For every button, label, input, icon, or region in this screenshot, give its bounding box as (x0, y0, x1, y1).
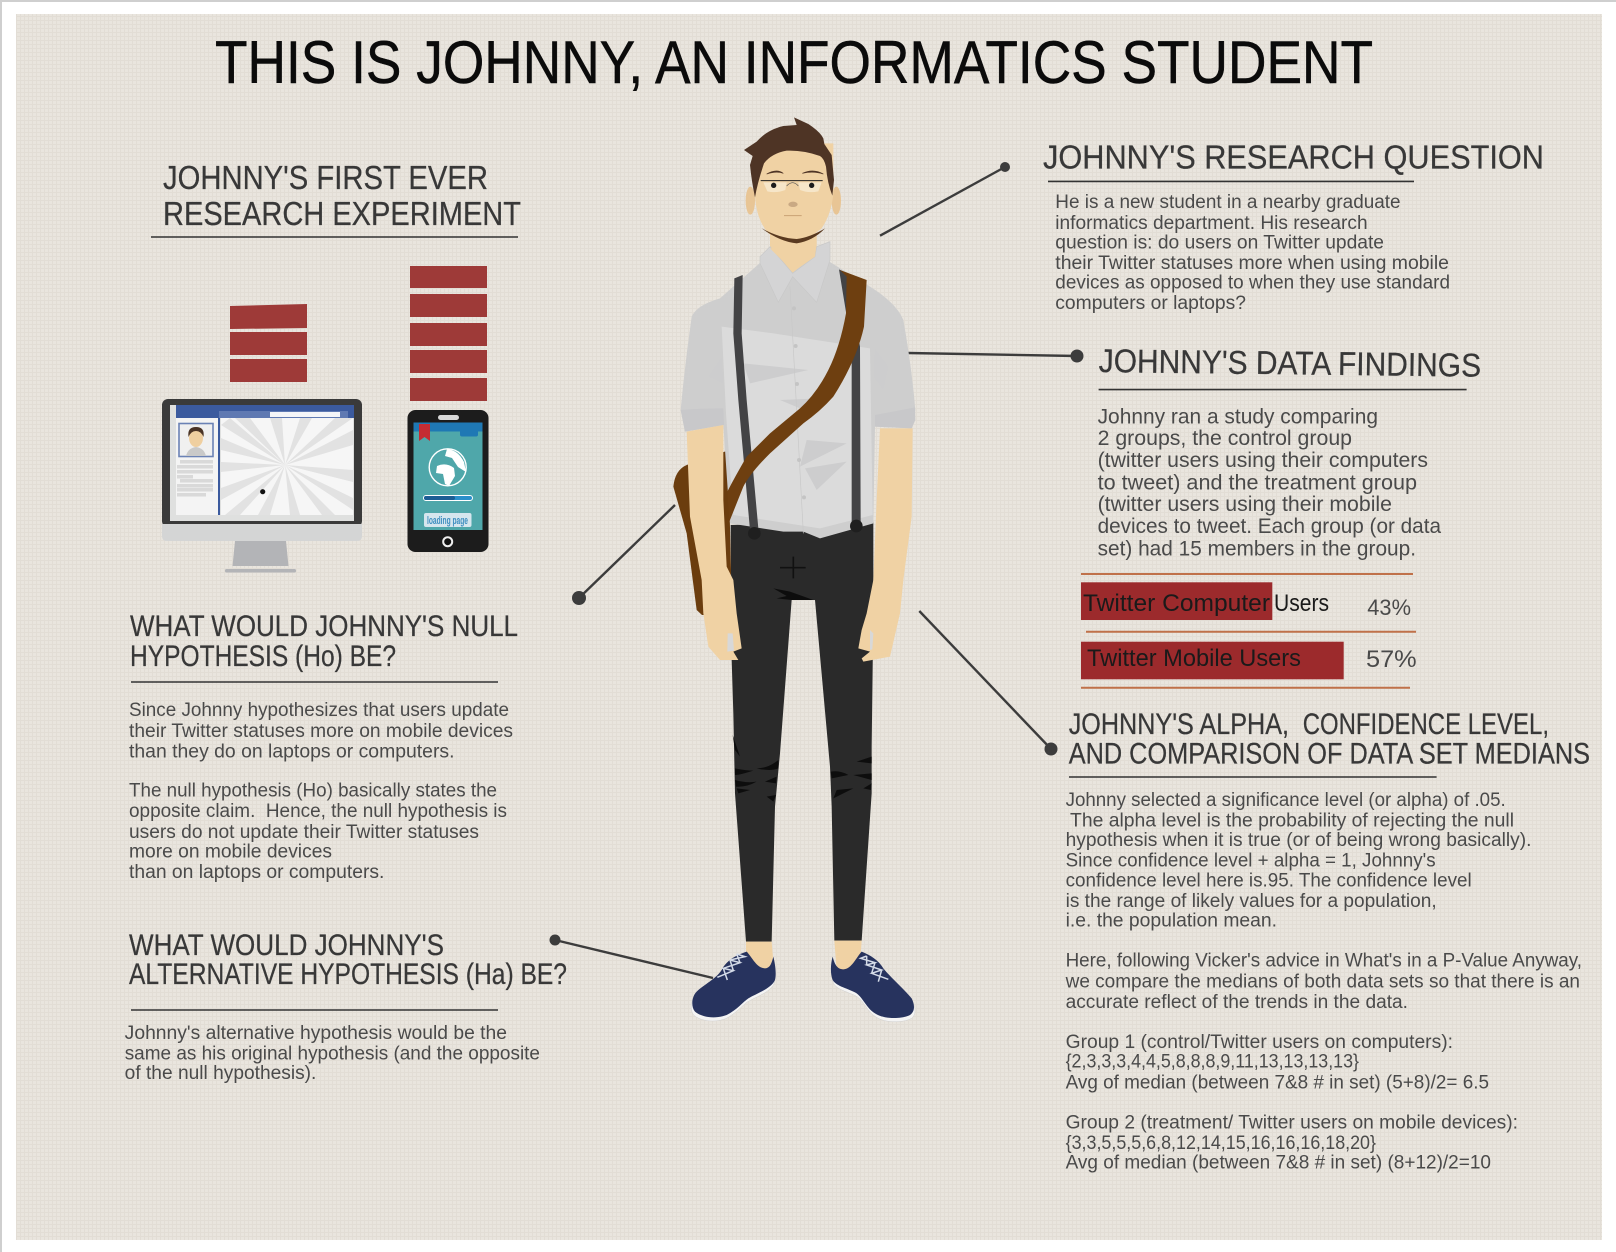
text: study description: Johnny ran a study comparing (1098, 406, 1378, 429)
panel: data findings (1081, 342, 1481, 688)
icon: globe (429, 449, 466, 486)
panel: first experiment (151, 159, 521, 572)
heading: alternative hypothesis: WHAT WOULD JOHNNY'S (129, 929, 444, 962)
text: group 2 data (1066, 1112, 1518, 1174)
plus mark (780, 557, 806, 578)
text: group 2 data: Avg of median (between 7&8 # in set) (8+12)/2=10 (1066, 1153, 1491, 1174)
bag (673, 448, 734, 615)
text: medians explanation: Here, following Vicker's advice in What's in a P-Value Anyway, (1066, 951, 1582, 972)
text: group 1 data: {2,3,3,3,4,4,5,8,8,8,9,11,13,13,13,13} (1066, 1052, 1359, 1073)
text: research question: their Twitter statuses more when using mobile (1055, 253, 1449, 274)
suspenders (733, 269, 863, 540)
text: group 2 data: {3,3,5,5,5,6,8,12,14,15,16,16,16,18,20} (1066, 1133, 1376, 1154)
text: study description: (twitter users using their computers (1098, 449, 1428, 472)
heading: first ever research experiment: JOHNNY'S FIRST EVER (163, 159, 488, 196)
bar: computer users: Twitter Computer (1083, 590, 1270, 617)
text: group 1 data (1066, 1032, 1489, 1093)
illustration: Johnny (673, 117, 915, 1022)
text: alternative hypothesis explanation: same as his original hypothesis (and the opposite (125, 1044, 540, 1064)
heading: research question: JOHNNY'S RESEARCH QUESTION (1043, 138, 1544, 176)
text: research question: devices as opposed to when they use standard (1055, 273, 1450, 294)
text: group 1 data: Avg of median (between 7&8 # in set) (5+8)/2= 6.5 (1066, 1072, 1489, 1093)
text: study description: 2 groups, the control group (1098, 427, 1352, 450)
bar stack: computer group (230, 304, 307, 382)
heading: first ever research experiment (151, 159, 521, 237)
text: medians explanation: accurate reflect of the trends in the data. (1066, 992, 1408, 1013)
text: alpha explanation: is the range of likely values for a population, (1066, 891, 1437, 912)
bar: computer users: 43% (1367, 595, 1411, 620)
text: alpha explanation: Johnny selected a significance level (or alpha) of .05. (1066, 790, 1506, 811)
right shoe (831, 941, 915, 1022)
text: alpha explanation: hypothesis when it is true (or of being wrong basically). (1066, 830, 1532, 851)
panel: research question (1043, 138, 1544, 314)
heading: first ever research experiment: RESEARCH EXPERIMENT (163, 195, 521, 232)
text: research question: computers or laptops? (1055, 293, 1246, 314)
text: null hypothesis explanation: users do not update their Twitter statuses (129, 822, 479, 843)
trousers (731, 522, 873, 942)
heading: data findings: JOHNNY'S DATA FINDINGS (1099, 342, 1481, 384)
text: alpha explanation: confidence level here is.95. The confidence level (1066, 870, 1472, 891)
text: null hypothesis explanation: than on laptops or computers. (129, 862, 384, 883)
heading: alternative hypothesis: ALTERNATIVE HYPOTHESIS (Ha) BE? (129, 958, 567, 991)
left shoe (691, 942, 776, 1021)
button: loading page (424, 513, 472, 527)
leader line: research question (880, 162, 1010, 236)
text: alternative hypothesis explanation: of the null hypothesis). (125, 1063, 316, 1084)
icon: smartphone (408, 410, 488, 552)
text: research question (1055, 192, 1450, 314)
panel: alpha and medians (1065, 708, 1590, 1174)
head (744, 117, 841, 243)
leader line: alternative hypothesis (550, 934, 713, 978)
text: group 1 data: Group 1 (control/Twitter users on computers): (1066, 1032, 1453, 1053)
arms and hands (687, 425, 913, 662)
title: THIS IS JOHNNY, AN INFORMATICS STUDENT (215, 29, 1373, 96)
text: group 2 data: Group 2 (treatment/ Twitter users on mobile devices): (1066, 1112, 1518, 1134)
text: study description: devices to tweet. Each group (or data (1098, 515, 1441, 538)
strap (727, 270, 867, 522)
bar: computer users: Users (1274, 590, 1329, 617)
text: research question: question is: do users on Twitter update (1055, 232, 1384, 253)
leader line: null hypothesis (572, 505, 675, 605)
leader line: data findings (908, 350, 1084, 362)
text: null hypothesis explanation (129, 700, 513, 883)
text: alpha explanation: i.e. the population mean. (1066, 910, 1277, 932)
text: research question: informatics department. His research (1055, 213, 1368, 234)
text: medians explanation (1065, 951, 1582, 1013)
bar: mobile users (1081, 642, 1417, 679)
text: study description: set) had 15 members in the group. (1098, 538, 1416, 560)
text: study description (1098, 406, 1441, 560)
text: null hypothesis explanation: their Twitter statuses more on mobile devices (129, 721, 513, 742)
text: alternative hypothesis explanation (125, 1023, 540, 1084)
bar stack: mobile group (410, 266, 487, 401)
bar: mobile users: Twitter Mobile Users (1087, 645, 1301, 672)
bar: computer users (1081, 582, 1411, 620)
text: research question: He is a new student in a nearby graduate (1055, 192, 1401, 213)
heading: alpha, confidence, medians: CONFIDENCE LEVEL, (1303, 708, 1549, 741)
text: alpha explanation (1066, 790, 1532, 932)
panel: null hypothesis (129, 610, 518, 883)
leader line: alpha and medians (919, 611, 1058, 756)
heading: alpha, confidence, medians (1069, 708, 1590, 777)
text: null hypothesis explanation: Since Johnny hypothesizes that users update (129, 700, 509, 721)
bar chart: twitter users (1081, 574, 1417, 688)
text: study description: to tweet) and the treatment group (1098, 472, 1417, 494)
text: study description: (twitter users using their mobile (1098, 493, 1392, 516)
shirt (681, 260, 915, 538)
text: null hypothesis explanation: opposite claim. Hence, the null hypothesis is (129, 801, 507, 822)
heading: alpha, confidence, medians: JOHNNY'S ALPHA, (1069, 708, 1289, 741)
text: null hypothesis explanation: more on mobile devices (129, 842, 332, 862)
bar: mobile users: 57% (1366, 646, 1417, 673)
thumb gaps (727, 630, 873, 652)
button: loading page: loading page (427, 515, 468, 527)
panel: alternative hypothesis (125, 929, 567, 1084)
heading: null hypothesis (130, 610, 518, 682)
neck and collar (760, 233, 830, 302)
heading: alternative hypothesis (129, 929, 567, 1010)
text: medians explanation: we compare the medians of both data sets so that there is an (1065, 971, 1580, 992)
text: alpha explanation: The alpha level is the probability of rejecting the null (1070, 810, 1514, 832)
text: null hypothesis explanation: The null hypothesis (Ho) basically states the (129, 781, 497, 802)
shoes (691, 941, 915, 1022)
text: alpha explanation: Since confidence level + alpha = 1, Johnny's (1066, 851, 1436, 872)
heading: null hypothesis: HYPOTHESIS (Ho) BE? (130, 640, 396, 673)
text: alternative hypothesis explanation: Johnny's alternative hypothesis would be the (125, 1023, 507, 1044)
icon: desktop computer (162, 399, 362, 572)
text: null hypothesis explanation: than they do on laptops or computers. (129, 742, 454, 762)
icon: profile photo (179, 424, 213, 456)
heading: null hypothesis: WHAT WOULD JOHNNY'S NULL (130, 610, 518, 643)
